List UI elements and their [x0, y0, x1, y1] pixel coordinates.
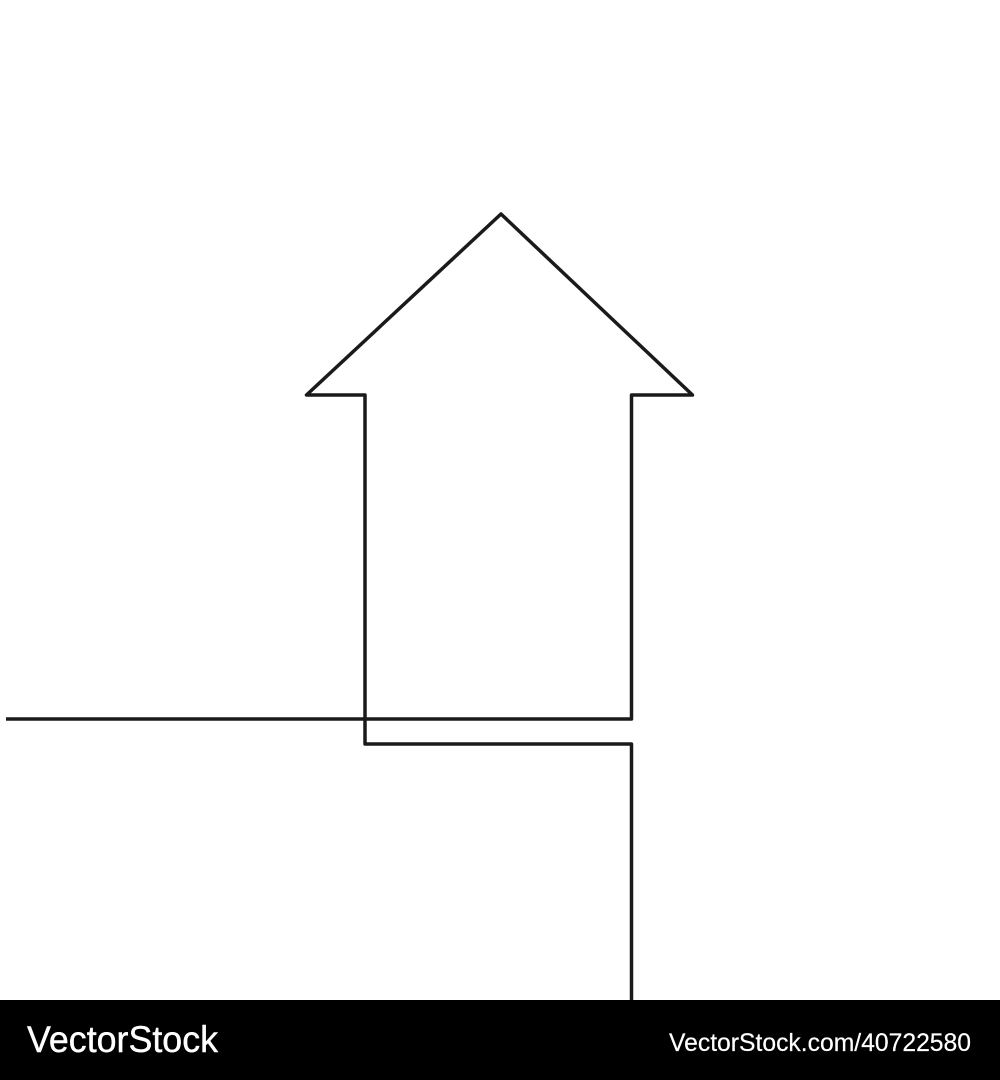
image id text: VectorStock.com/40722580	[669, 1029, 971, 1057]
logo text: VectorStock	[27, 1019, 218, 1060]
footer watermark bar	[0, 1000, 1000, 1080]
icon: continuous line house arrow	[6, 214, 692, 1000]
